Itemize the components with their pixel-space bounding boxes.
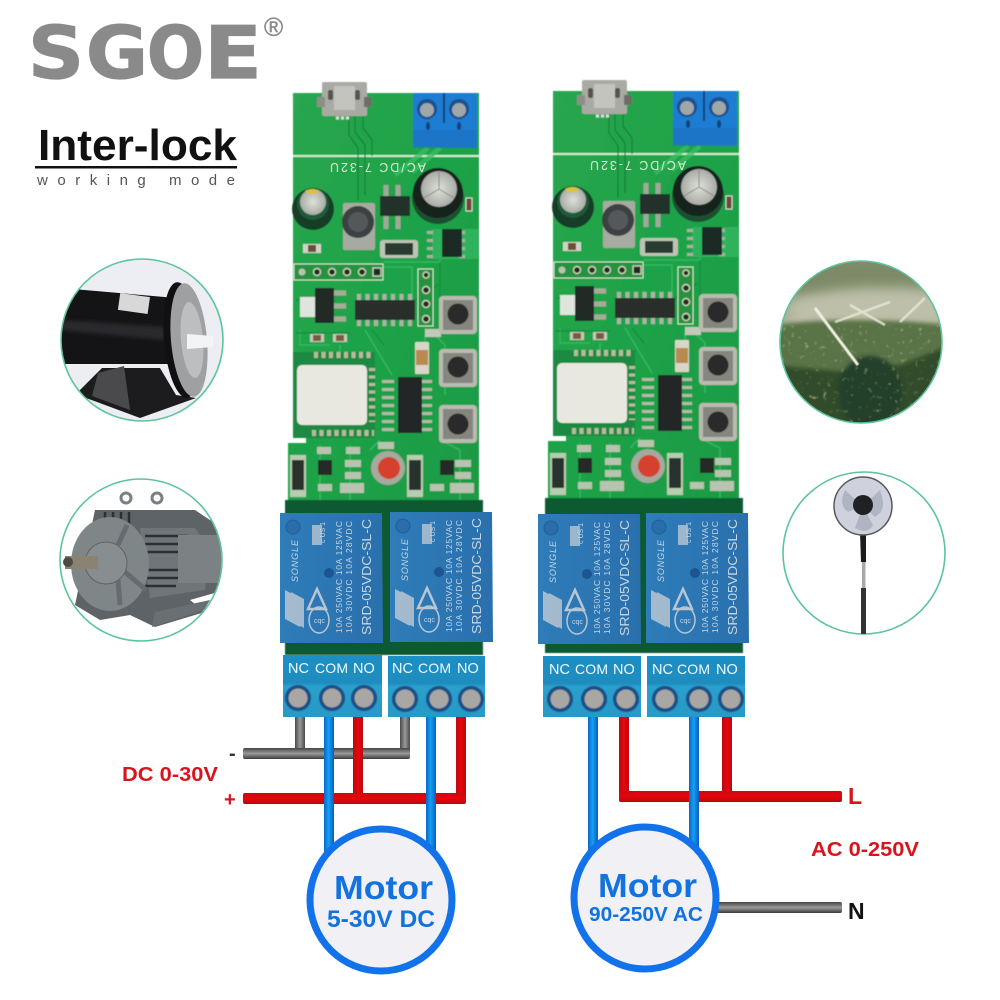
- relay right-2: 10A 250VAC 10A 125VAC: [700, 521, 710, 633]
- label: AC 0-250V: AC 0-250V: [811, 839, 920, 861]
- terminal block right-2: [647, 656, 745, 717]
- terminal block left-2: NC: [392, 661, 413, 677]
- brand logo: SGOE: S: [28, 11, 84, 95]
- photo circle: DC motor black: [60, 258, 224, 422]
- relay left-1: [280, 513, 383, 643]
- motor symbol: 90-250V AC: Motor: [598, 867, 697, 904]
- terminal block left-2: COM: [418, 660, 451, 676]
- motor symbol: 5-30V DC: 5-30V DC: [327, 906, 435, 933]
- photo circle: grey industrial motor: [55, 475, 230, 645]
- heading: Inter-lock working mode: Inter-lock: [38, 121, 238, 170]
- motor symbol: 90-250V AC: [574, 827, 716, 969]
- photo circle: irrigation sprinklers: [779, 260, 943, 424]
- label: DC 0-30V: DC 0-30V: [122, 764, 219, 786]
- terminal block right-2: NC: [652, 662, 673, 678]
- relay left-2: 10A 30VDC 10A 28VDC: [454, 520, 464, 632]
- relay right-2: c US 1: [686, 522, 693, 543]
- board print: input voltage: AC/DC 7-32U: [330, 160, 426, 174]
- relay right-1: SONGLE: [548, 540, 558, 583]
- relay left-2: SONGLE: [400, 538, 410, 581]
- brand logo: SGOE: ®: [264, 12, 283, 42]
- label: minus: -: [229, 743, 236, 765]
- brand logo: SGOE: [28, 11, 283, 95]
- motor symbol: 90-250V AC: 90-250V AC: [589, 904, 703, 926]
- terminal block left-1: NC: [288, 661, 309, 677]
- relay right-2: SONGLE: [656, 539, 666, 582]
- relay left-1: SONGLE: [290, 539, 300, 582]
- wiring: AC side: [588, 717, 842, 913]
- terminal block right-1: NC: [549, 662, 570, 678]
- heading: Inter-lock working mode: working mode: [36, 172, 235, 189]
- terminal block right-2: COM: [677, 661, 710, 677]
- motor symbol: 5-30V DC: Motor: [334, 869, 433, 906]
- terminal block left-1: NO: [353, 661, 375, 677]
- relay left-2: c US 1: [430, 521, 437, 542]
- relay right-2: 10A 30VDC 10A 28VDC: [710, 521, 720, 633]
- relay right-1: cqc: [572, 619, 583, 626]
- relay left-1: 10A 30VDC 10A 28VDC: [344, 521, 354, 633]
- relay right-1: 10A 250VAC 10A 125VAC: [592, 522, 602, 634]
- relay left-2: cqc: [424, 617, 435, 624]
- terminal block left-2: [388, 656, 485, 717]
- terminal block right-1: NO: [613, 662, 635, 678]
- board print: input voltage: AC/DC 7-32U: [590, 158, 686, 172]
- relay right-2: cqc: [680, 618, 691, 625]
- terminal block left-1: COM: [315, 660, 348, 676]
- label: N: N: [848, 898, 865, 924]
- relay right-1: SRD-05VDC-SL-C: [617, 520, 632, 636]
- terminal block right-1: [543, 656, 641, 717]
- terminal block right-1: COM: [575, 661, 608, 677]
- motor symbol: 5-30V DC: [310, 829, 452, 971]
- relay left-1: cqc: [314, 618, 325, 625]
- relay left-1: 10A 250VAC 10A 125VAC: [334, 521, 344, 633]
- photo circle: standing fan: [783, 472, 945, 636]
- brand logo: SGOE: E: [204, 11, 262, 95]
- relay left-2: SRD-05VDC-SL-C: [469, 518, 484, 634]
- circuit board left: [280, 82, 493, 717]
- relay right-1: c US 1: [578, 523, 585, 544]
- relay right-1: [538, 514, 641, 644]
- relay left-1: SRD-05VDC-SL-C: [359, 519, 374, 635]
- terminal block right-2: NO: [716, 662, 738, 678]
- relay right-1: 10A 30VDC 10A 28VDC: [602, 522, 612, 634]
- circuit board right: [538, 80, 749, 717]
- label: plus: +: [224, 789, 236, 811]
- terminal block left-2: NO: [457, 661, 479, 677]
- wiring: DC side: [243, 717, 466, 852]
- label: L: L: [848, 783, 862, 809]
- relay right-2: SRD-05VDC-SL-C: [725, 519, 740, 635]
- brand logo: SGOE: O: [147, 11, 204, 95]
- relay left-2: [390, 512, 493, 642]
- relay left-1: c US 1: [320, 522, 327, 543]
- relay right-2: [646, 513, 749, 643]
- brand logo: SGOE: G: [86, 11, 148, 95]
- relay left-2: 10A 250VAC 10A 125VAC: [444, 520, 454, 632]
- terminal block left-1: [283, 655, 382, 717]
